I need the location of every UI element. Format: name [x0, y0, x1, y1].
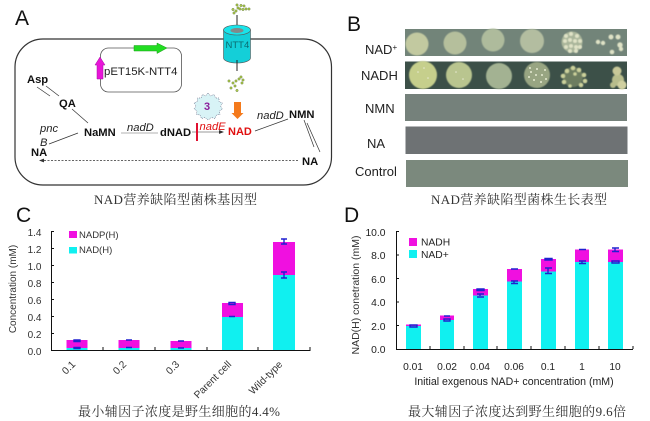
caption B: NAD营养缺陷型菌株生长表型 [431, 192, 607, 207]
stacked bars [66, 242, 295, 350]
y axis title: Concentration (mM) [8, 245, 19, 333]
panel letter D: D [344, 204, 359, 227]
nadE block bar [196, 123, 198, 141]
x tick labels: 0.02 [437, 362, 457, 373]
y tick labels: 0.4 [28, 313, 42, 324]
cell outline [15, 39, 332, 185]
legend [69, 230, 119, 256]
row labels [355, 42, 398, 179]
pathway labels: QA [59, 98, 76, 110]
stacked bars [406, 250, 623, 350]
x tick labels: 0.01 [403, 362, 423, 373]
icon: orange arrow [232, 102, 244, 119]
error bars [74, 239, 287, 348]
y tick labels: 0.2 [28, 330, 42, 341]
y tick labels: 4.0 [371, 298, 386, 309]
plate row: NAD+ [405, 28, 627, 56]
pathway labels: nadD [257, 110, 284, 122]
row labels: + [392, 43, 397, 52]
x tick labels: 0.1 [60, 359, 78, 377]
row labels: NA [367, 136, 385, 151]
caption D: 最大辅因子浓度达到野生细胞的9.6倍 [408, 404, 626, 419]
panel letter B: B [347, 13, 361, 36]
pathway labels: nadE [200, 121, 226, 133]
x axis title: Initial exgenous NAD+ concentration (mM) [414, 376, 614, 388]
legend [409, 238, 450, 261]
error bars [410, 248, 619, 327]
y tick labels [28, 228, 42, 358]
x tick labels: 0.3 [164, 359, 182, 377]
pathway labels [27, 74, 318, 168]
pathway labels: NA [31, 147, 47, 159]
icon: NTT4 transporter: NTT4 [226, 40, 249, 51]
row labels: NMN [365, 101, 395, 116]
pathway arrows [37, 86, 320, 162]
x tick labels: 1 [579, 362, 585, 373]
icon: molecules inside [228, 76, 244, 92]
icon: magenta gene arrow [95, 57, 105, 79]
row labels: NAD [365, 42, 392, 57]
icon: molecules outside [232, 4, 250, 14]
y tick labels: 1.0 [28, 262, 42, 273]
y tick labels: 8.0 [371, 251, 386, 262]
caption A: NAD营养缺陷型菌株基因型 [94, 192, 257, 207]
y tick labels: 0.8 [28, 279, 42, 290]
pathway labels: pnc [39, 123, 58, 135]
plasmid [95, 43, 182, 92]
x tick labels: Parent cell [192, 359, 234, 401]
panel letter C: C [16, 204, 31, 227]
caption C: 最小辅因子浓度是野生细胞的4.4% [78, 404, 280, 419]
legend: NADP(H) [79, 230, 119, 241]
x tick labels: 0.04 [470, 362, 490, 373]
plate row: NA [406, 126, 628, 154]
y axis title: NAD(H) conetration (mM) [350, 235, 362, 355]
plasmid label: pET15K-NTT4 [104, 66, 177, 78]
panel letter A: A [15, 7, 29, 30]
x tick labels: 10 [609, 362, 621, 373]
legend: NAD(H) [79, 245, 112, 256]
row labels: Control [355, 164, 397, 179]
y tick labels: 10.0 [365, 228, 386, 239]
x tick labels: 0.2 [111, 359, 129, 377]
y tick labels: 0.6 [28, 296, 42, 307]
panel: B growth phenotype [347, 13, 628, 207]
plate row: NADH [405, 61, 627, 90]
y tick labels: 1.2 [28, 245, 42, 256]
legend: NAD+ [421, 250, 449, 261]
icon: green gene arrow [134, 43, 167, 54]
pathway labels: dNAD [160, 127, 191, 139]
y tick labels: 2.0 [371, 322, 386, 333]
panel: C cofactor chart [8, 204, 310, 419]
axes [396, 232, 633, 350]
icon: badge 3 [194, 93, 222, 120]
pathway labels: NMN [289, 109, 314, 121]
legend: NADH [421, 238, 450, 248]
pathway labels: nadD [127, 122, 154, 134]
x tick labels: 0.06 [504, 362, 524, 373]
x tick labels: Wild-type [247, 359, 285, 397]
pathway labels: B [40, 137, 48, 149]
pathway labels: Asp [27, 74, 48, 86]
icon: NTT4 transporter [224, 15, 250, 71]
axes [51, 232, 310, 350]
plate row: NMN [405, 94, 627, 121]
pathway labels: NAD [228, 126, 252, 138]
x tick labels [403, 362, 621, 373]
panel: A genotype diagram [15, 4, 332, 207]
y tick labels: 1.4 [28, 228, 42, 239]
plate row: Control [406, 160, 628, 187]
x tick labels: 0.1 [541, 362, 555, 373]
pathway labels: NaMN [84, 127, 116, 139]
row labels: NADH [361, 68, 398, 83]
x tick labels [60, 359, 285, 401]
icon: badge 3: 3 [204, 101, 210, 113]
y tick labels: 0.0 [371, 345, 386, 356]
y tick labels: 6.0 [371, 275, 386, 286]
y tick labels: 0.0 [28, 347, 42, 358]
panel: D NAD(H) chart [344, 204, 633, 419]
pathway labels: NA [302, 156, 318, 168]
y tick labels [365, 228, 386, 356]
